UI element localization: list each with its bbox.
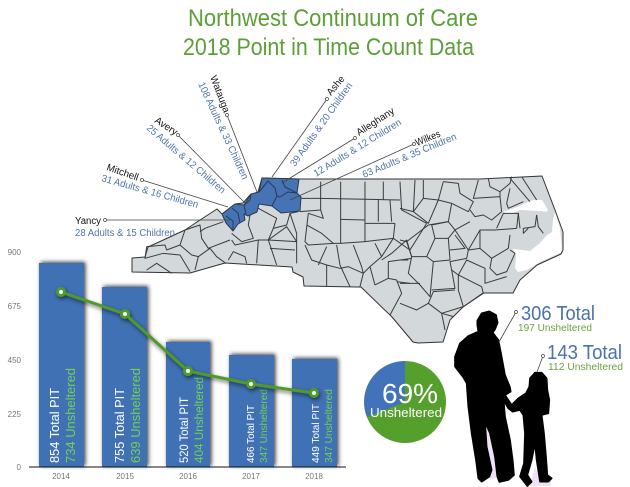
year labels: 2014 (52, 472, 70, 481)
callout: adults total: 306 Total (521, 303, 595, 325)
bar value labels: 449 Total PIT (311, 404, 322, 463)
year labels: 2016 (179, 472, 197, 481)
label: Yancy: 28 Adults & 15 Children (75, 228, 175, 239)
trend line markers (59, 290, 316, 395)
county boundaries east (400, 177, 543, 330)
bar value labels: 520 Total PIT (179, 397, 191, 463)
callout: children total (537, 342, 623, 373)
label: Avery: 25 Adults & 12 Children (144, 123, 227, 196)
label: Yancy: Yancy (75, 216, 101, 227)
label: Watauga: Watauga (207, 74, 232, 115)
highlighted counties (222, 178, 301, 231)
year labels: 2018 (305, 472, 323, 481)
pie chart: 69% unsheltered (364, 361, 446, 443)
label: Wilkes: 63 Adults & 35 Children (361, 132, 458, 181)
bar value labels: 854 Total PIT (47, 388, 62, 463)
y axis labels: 900 (8, 248, 22, 257)
label: Mitchell: 31 Adults & 16 Children (100, 173, 199, 211)
label: Ashe: 39 Adults & 20 Children (288, 81, 355, 169)
callout: children total: 112 Unsheltered (548, 362, 623, 373)
label: Wilkes: Wilkes (414, 129, 442, 149)
bar value labels: 347 Unsheltered (259, 389, 270, 463)
label: Avery: Avery (152, 115, 179, 138)
label: Mitchell: Mitchell (105, 162, 140, 184)
bar value labels: 639 Unsheltered (128, 368, 143, 463)
bar chart (8, 248, 346, 481)
pie chart: 69% unsheltered: Unsheltered (370, 405, 442, 420)
title: 2018 Point in Time Count Data (183, 34, 475, 61)
label: Alleghany (282, 106, 404, 183)
x axis (29, 466, 346, 468)
y axis labels: 675 (8, 302, 22, 311)
label: Watauga: 108 Adults & 33 Children (195, 81, 250, 181)
county boundaries west (145, 182, 427, 315)
label: Ashe: Ashe (325, 74, 348, 98)
bar value labels: 734 Unsheltered (63, 368, 78, 463)
y axis labels: 450 (8, 356, 22, 365)
callout: adults total: 197 Unsheltered (518, 323, 592, 334)
bar value labels: 755 Total PIT (112, 388, 127, 463)
year labels: 2015 (116, 472, 134, 481)
bar value labels (47, 368, 335, 463)
y axis labels: 225 (8, 410, 22, 419)
callout: adults total (499, 303, 595, 342)
bar value labels: 347 Unsheltered (324, 389, 335, 463)
year labels (52, 472, 323, 481)
label: Ashe (272, 74, 355, 177)
y axis labels: 0 (17, 463, 22, 472)
map: North Carolina counties (132, 176, 563, 343)
title (183, 5, 478, 61)
silhouette: adult and child (455, 311, 552, 486)
title: Northwest Continuum of Care (188, 5, 478, 32)
pie chart: 69% unsheltered: 69% (382, 378, 438, 409)
year labels: 2017 (242, 472, 260, 481)
unsheltered trend line (56, 287, 319, 398)
label: Mitchell (100, 162, 228, 211)
callout: children total: 143 Total (547, 342, 622, 364)
label: Wilkes (290, 129, 458, 200)
label: Alleghany: Alleghany (355, 106, 397, 139)
county labels (75, 74, 458, 239)
label: Alleghany: 12 Adults & 12 Children (312, 117, 404, 180)
y axis labels (8, 248, 22, 472)
bar value labels: 466 Total PIT (246, 405, 257, 463)
bars (39, 263, 337, 467)
water: sounds (503, 200, 562, 272)
label: Yancy (75, 216, 230, 239)
bar value labels: 404 Unsheltered (194, 377, 206, 463)
